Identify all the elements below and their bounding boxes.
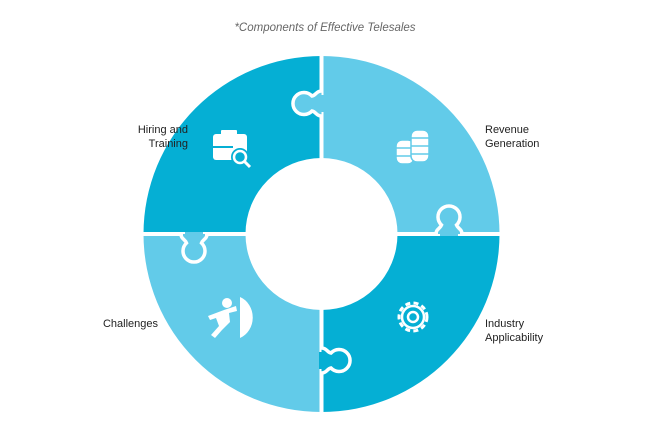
ring xyxy=(141,54,502,414)
panel: industry applicability (bottom-right) xyxy=(322,234,500,412)
label: hiring and training: Training xyxy=(149,138,188,150)
label: revenue generation: Generation xyxy=(485,138,539,150)
icon: gear xyxy=(399,303,427,331)
knob top xyxy=(293,91,324,116)
label: challenges: Challenges xyxy=(103,318,158,330)
knob right xyxy=(434,206,464,236)
panel: challenges (bottom-left) xyxy=(144,234,322,412)
panel: hiring and training (top-left) xyxy=(144,56,322,234)
label: industry applicability: Industry xyxy=(485,318,525,330)
label: industry applicability: Applicability xyxy=(485,332,544,344)
icon: coins xyxy=(396,130,429,164)
label: revenue generation: Revenue xyxy=(485,124,529,136)
knob bottom xyxy=(319,348,350,373)
title: *Components of Effective Telesales xyxy=(234,22,416,34)
label: hiring and training: Hiring and xyxy=(138,124,188,136)
knob left xyxy=(179,232,209,262)
icon: briefcase with magnifier xyxy=(213,130,250,167)
panel: revenue generation (top-right) xyxy=(322,56,500,234)
icon: person pushing xyxy=(208,297,253,338)
